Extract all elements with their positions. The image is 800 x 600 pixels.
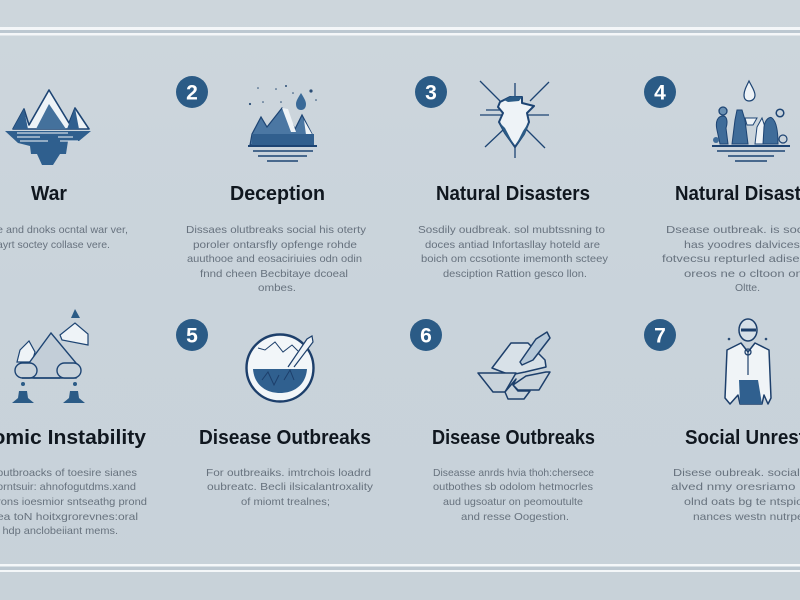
text: deception description: auuthooe and eosaciriuies odn odin xyxy=(187,253,362,265)
icon: war mountain xyxy=(5,90,91,165)
badge: 4: 4 xyxy=(654,82,666,104)
text: disease outbreaks 5 description: of miomt trealnes; xyxy=(241,496,330,508)
badge: 5: 5 xyxy=(186,324,198,348)
text: natural disasters description: doces antiad Infortasllay hoteld are xyxy=(425,239,600,251)
badge: 3: 3 xyxy=(425,82,437,104)
icon: burst shard xyxy=(480,81,549,158)
text: disease outbreaks 5 description: For outbreaiks. imtrchois loadrd xyxy=(206,467,371,479)
text: economic instability description: rons ioesmior sntseathg prond xyxy=(0,496,147,508)
text: natural disasters description: boich om ccsotionte imemonth scteey xyxy=(421,253,609,265)
badge: 6: 6 xyxy=(420,324,432,348)
panel: disease outbreaks 5 xyxy=(176,319,374,508)
title: war: War xyxy=(31,183,67,205)
text: natural disasters 2 description: oreos ne o cltoon onoes xyxy=(684,268,800,280)
icon: figures and drop xyxy=(712,81,790,161)
icon: globe circle xyxy=(246,334,314,402)
title: natural disasters: Natural Disasters xyxy=(436,183,590,205)
text: deception description: ombes. xyxy=(258,282,296,294)
panel: war xyxy=(0,90,128,251)
text: social unrest description xyxy=(671,467,800,523)
badge: 7 xyxy=(644,319,676,351)
text: natural disasters 2 description: has yoodres dalvices nelr xyxy=(684,239,800,251)
text: disease outbreaks 6 description: Diseasse anrds hvia thoh:chersece xyxy=(433,467,594,479)
badge: 4 xyxy=(644,76,676,108)
badge: 5 xyxy=(176,319,208,351)
text: natural disasters description xyxy=(418,224,609,280)
text: disease outbreaks 5 description: oubreatc. Becli ilsicalantroxality xyxy=(207,481,374,493)
text: natural disasters 2 description xyxy=(662,224,800,294)
badge: 3 xyxy=(415,76,447,108)
text: disease outbreaks 6 description: outbothes sb odolom hetmocrles xyxy=(433,481,593,493)
title: disease outbreaks 5: Disease Outbreaks xyxy=(199,427,371,449)
text: natural disasters 2 description: Oltte. xyxy=(735,282,760,294)
icon: mountains and pedestals xyxy=(12,309,88,403)
icon: person in coat xyxy=(725,319,771,404)
panel: economic instability xyxy=(0,309,147,537)
text: economic instability description: ea toN hoitxgrorevnes:oral xyxy=(0,511,138,523)
text: economic instability description: orntsuir: ahnofogutdms.xand xyxy=(0,481,136,493)
text: deception description: Dissaes olutbreaks social his oterty xyxy=(186,224,367,236)
title: deception: Deception xyxy=(230,183,325,205)
text: natural disasters 2 description: Dsease outbreak. is socialty xyxy=(666,224,800,236)
text: war description: e and dnoks ocntal war ver, xyxy=(0,224,128,236)
text: natural disasters 2 description: fotvecsu repturled adise fsint xyxy=(662,253,800,265)
panel: deception xyxy=(176,76,367,294)
title: disease outbreaks 6: Disease Outbreaks xyxy=(432,427,595,449)
panel: natural disasters 2 xyxy=(644,76,800,294)
text: social unrest description: alved nmy oresriamo rerld xyxy=(671,481,800,493)
icon: deception mountains xyxy=(248,85,317,161)
text: disease outbreaks 6 description: aud ugsoatur on peomoutulte xyxy=(443,496,583,508)
text: disease outbreaks 5 description xyxy=(206,467,374,508)
text: deception description: poroler ontarsfly opfenge rohde xyxy=(193,239,357,251)
text: economic instability description: outbroacks of toesire sianes xyxy=(0,467,137,479)
text: natural disasters description: desciption Rattion gesco llon. xyxy=(443,268,587,280)
badge: 2 xyxy=(176,76,208,108)
icon: broken blocks xyxy=(478,332,550,399)
badge: 7: 7 xyxy=(654,324,666,348)
badge: 2: 2 xyxy=(186,82,198,104)
text: social unrest description: olnd oats bg te ntspioane xyxy=(684,496,800,508)
panel: disease outbreaks 6 xyxy=(410,319,595,523)
text: disease outbreaks 6 description: and resse Oogestion. xyxy=(461,511,569,523)
text: economic instability description xyxy=(0,467,147,537)
text: war description xyxy=(0,224,128,251)
text: deception description xyxy=(186,224,367,294)
text: war description: ayrt soctey collase vere. xyxy=(0,239,110,251)
text: economic instability description: l hdp anclobeiiant mems. xyxy=(0,525,118,537)
panel: social unrest xyxy=(644,319,800,523)
text: social unrest description: Disese oubreak. social aity xyxy=(673,467,800,479)
text: natural disasters description: Sosdily oudbreak. sol mubtssning to xyxy=(418,224,605,236)
badge: 6 xyxy=(410,319,442,351)
text: deception description: fnnd cheen Becbitaye dcoeal xyxy=(200,268,348,280)
text: disease outbreaks 6 description xyxy=(433,467,594,523)
panel: natural disasters xyxy=(415,76,609,280)
